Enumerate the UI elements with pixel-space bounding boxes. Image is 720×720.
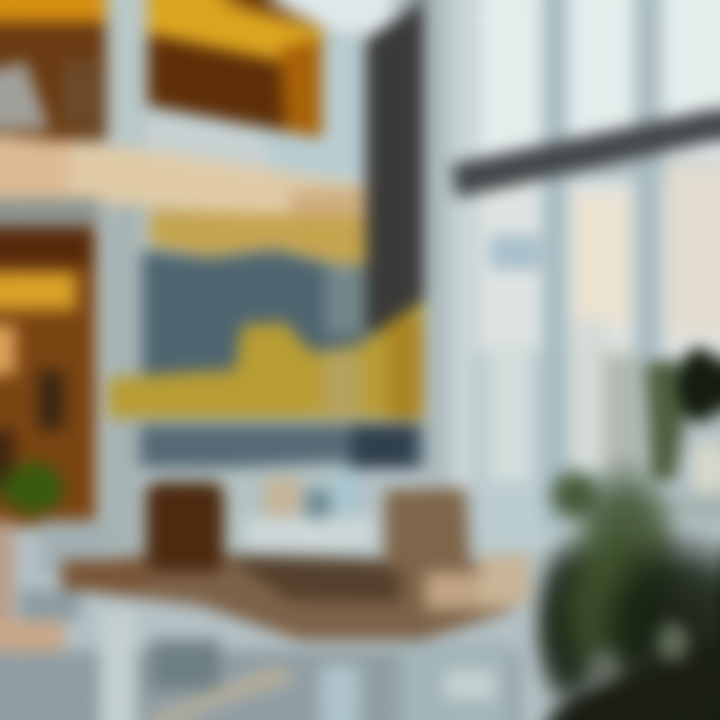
upper orange panel [148,0,322,138]
blue-grey chart panel [142,250,368,385]
left upper alcove [0,0,106,140]
small left plant [4,462,64,514]
right white column [424,0,478,490]
beige horizontal band [0,135,385,225]
window mullions [542,0,662,530]
brown box right [385,488,470,570]
lower left floor [0,520,106,652]
yellow chart area [108,300,424,420]
left gray ledge [0,198,100,224]
brown box left [146,482,224,572]
plant [530,343,720,720]
white vertical column [112,0,142,270]
blue-grey lower band [140,424,424,468]
dark window crossbar [452,108,720,198]
pale glass band [146,40,362,200]
floor [100,610,510,720]
tan and yellow wall strip [150,210,385,268]
top white streak [262,0,392,38]
window panes [476,0,720,550]
cushions [185,462,385,560]
table top [62,555,530,640]
left brown alcove [0,226,96,526]
dark column [366,0,424,335]
column segment [106,205,140,560]
